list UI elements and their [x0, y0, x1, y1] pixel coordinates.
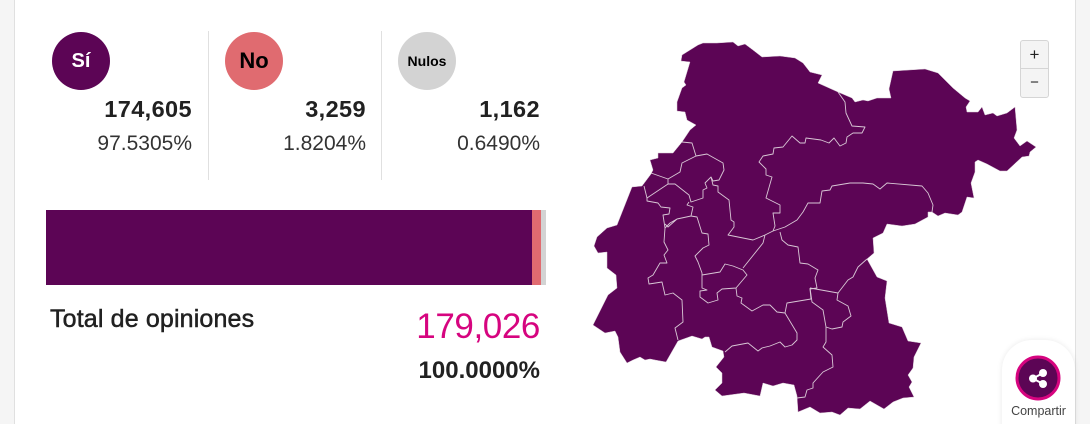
stacked bar chart [46, 210, 546, 285]
option: Sí [52, 32, 192, 155]
map zoom controls [1020, 40, 1049, 98]
option: Nulos [398, 32, 540, 155]
zoom out button: − [1030, 74, 1039, 91]
municipality borders [644, 92, 933, 398]
icon: No circle: No [239, 48, 269, 73]
No percentage: 1.8204% [283, 132, 366, 155]
icon: Sí circle: Sí [72, 50, 90, 72]
Sí percentage: 97.5305% [97, 132, 192, 155]
total votes: 179,026 [416, 307, 540, 346]
Nulos votes: 1,162 [479, 96, 540, 122]
divider [208, 31, 209, 180]
heading: total de opiniones: Total de opiniones [50, 305, 254, 333]
option: No [225, 32, 366, 155]
icon: Nulos circle [398, 32, 456, 90]
bar segment: Sí [46, 210, 532, 285]
Sí votes: 174,605 [104, 96, 192, 122]
bar segment: No [532, 210, 541, 285]
map outline [593, 42, 1036, 415]
No votes: 3,259 [305, 96, 366, 122]
icon: Nulos circle: Nulos [408, 53, 446, 69]
zoom in button: + [1030, 45, 1039, 64]
icon: No circle [225, 32, 283, 90]
zoom in button [1021, 41, 1048, 69]
share label: Compartir [1011, 404, 1066, 418]
total percentage: 100.0000% [419, 357, 540, 384]
icon: Sí circle [52, 32, 110, 90]
divider [381, 31, 382, 180]
Nulos percentage: 0.6490% [457, 132, 540, 155]
share button [1002, 340, 1075, 424]
icon: share [1016, 356, 1060, 400]
